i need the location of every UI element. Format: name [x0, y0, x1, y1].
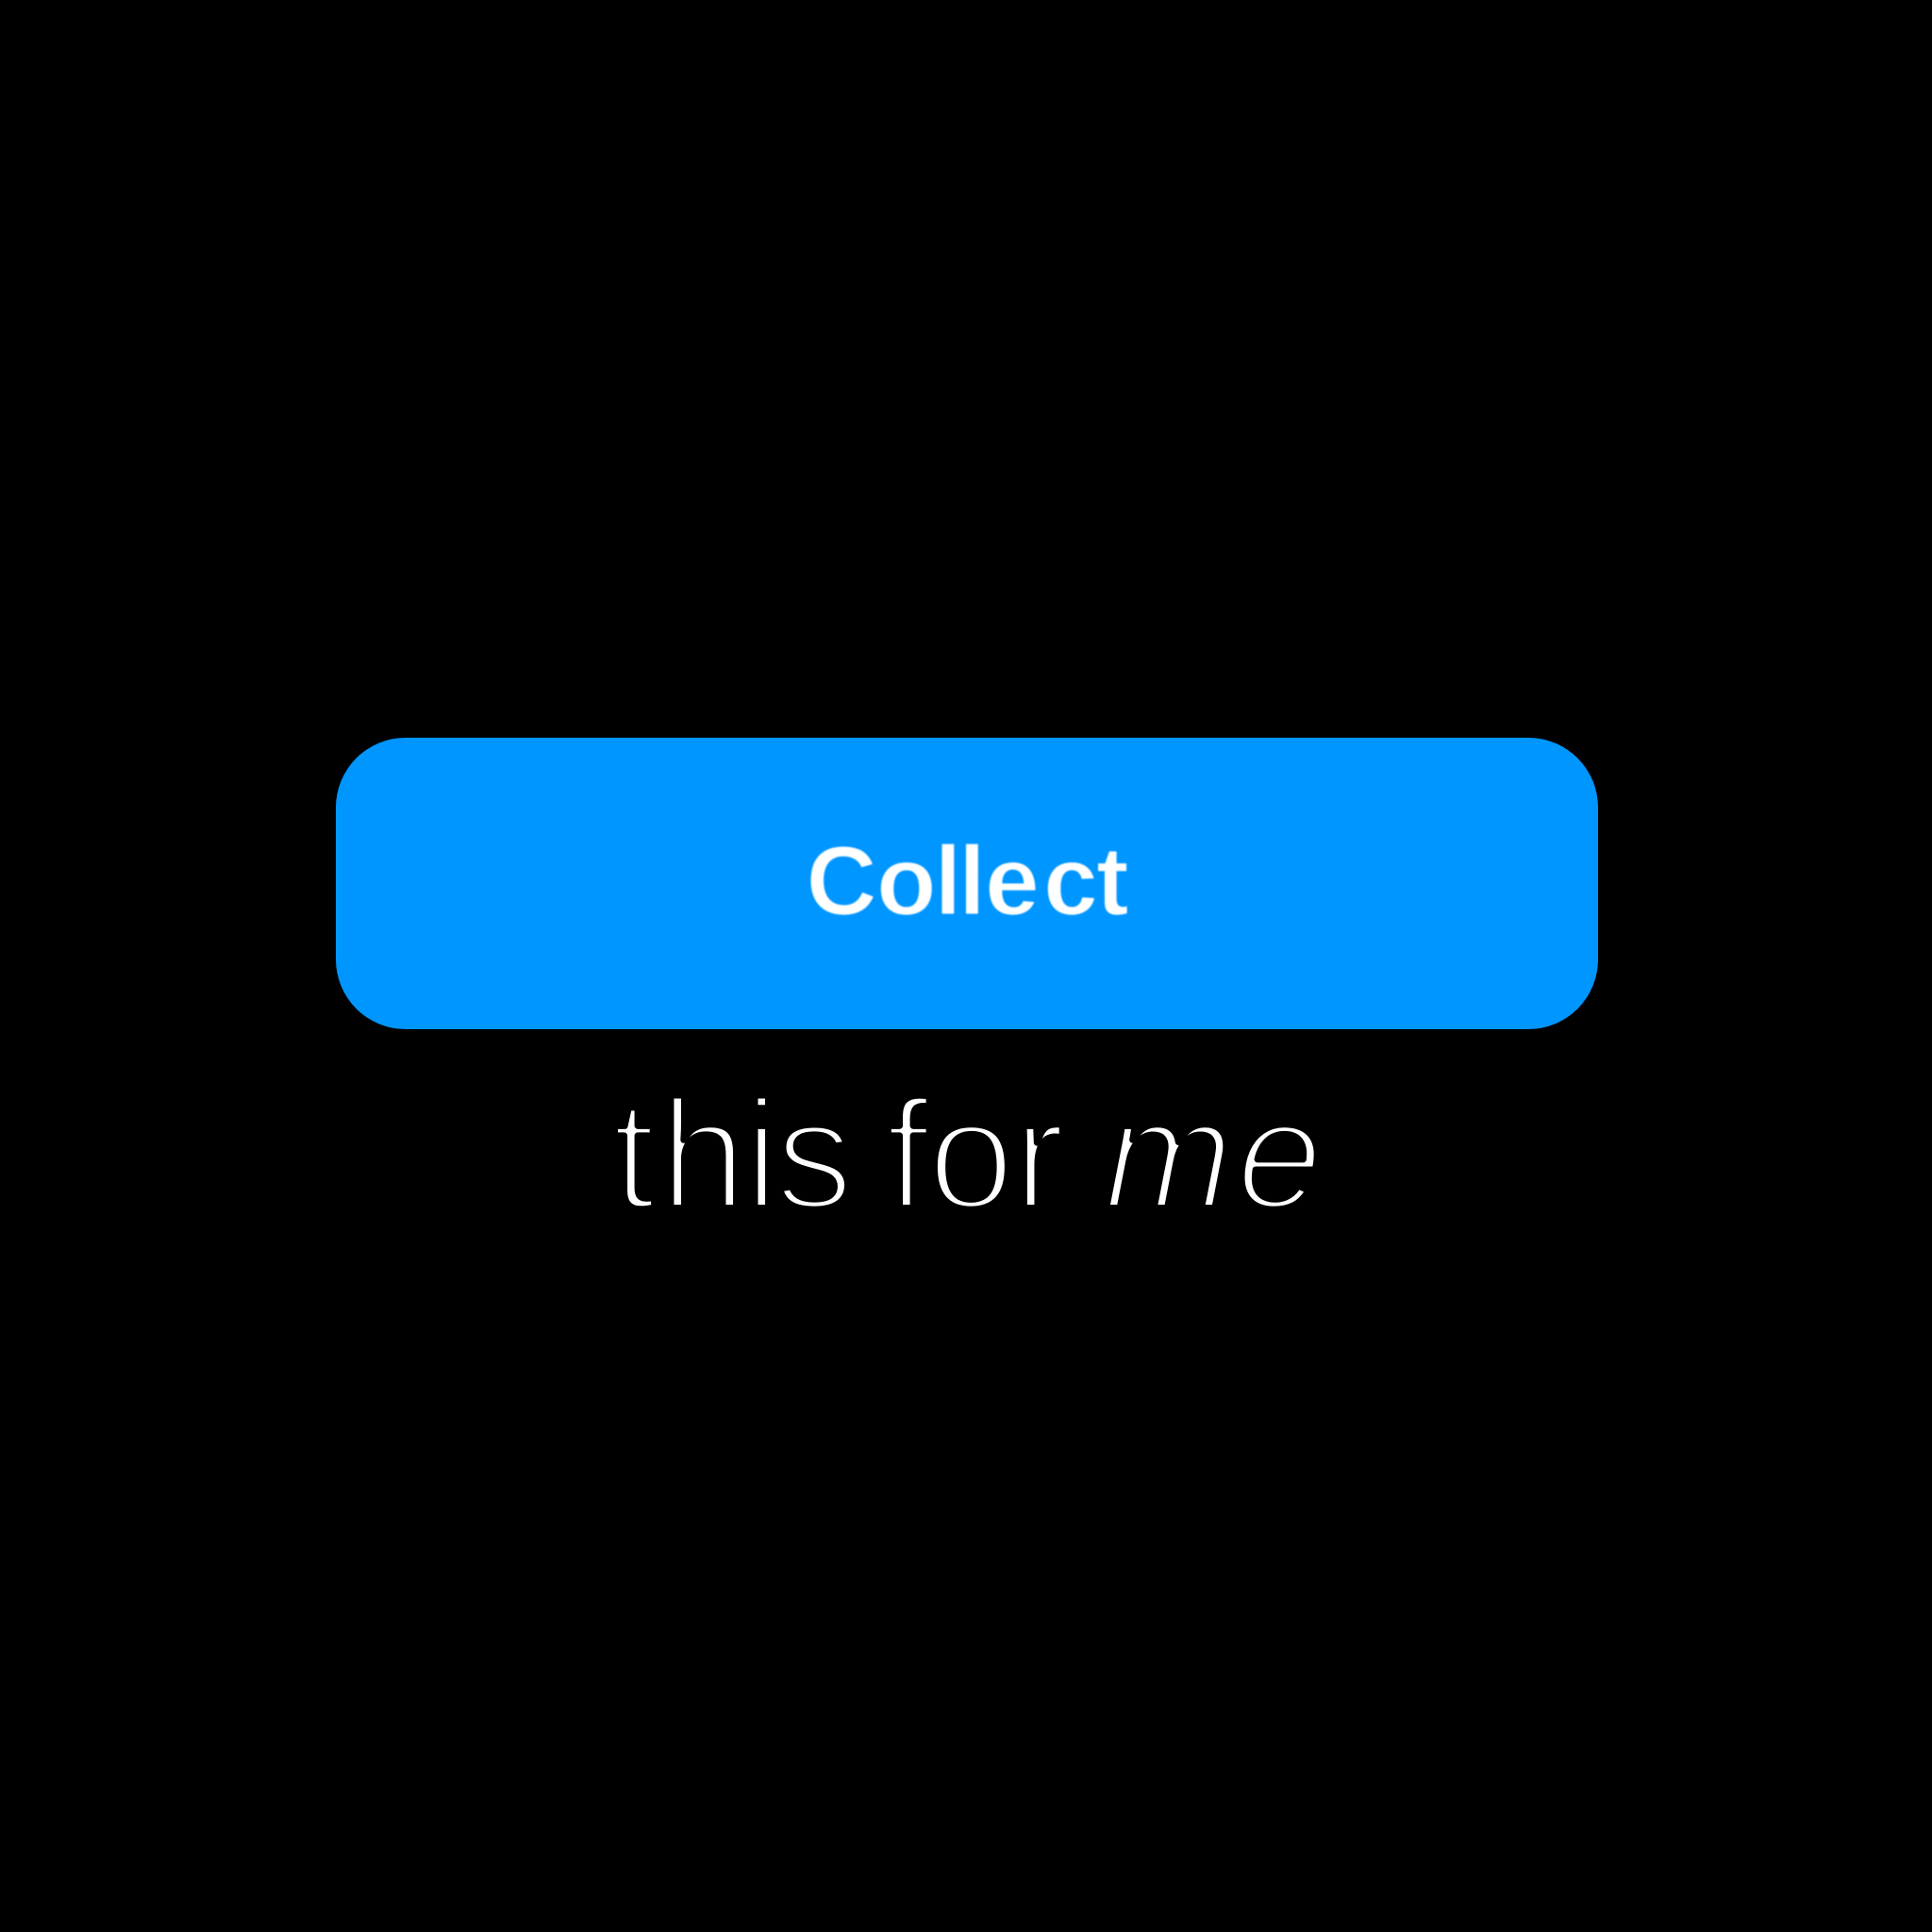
button label: Collect [806, 826, 1129, 936]
caption: this for me: this [612, 1068, 853, 1241]
caption: this for me: me [1104, 1068, 1323, 1241]
button shape [336, 738, 1598, 1029]
button: Collect [336, 738, 1598, 1029]
caption: this for me: for [886, 1068, 1065, 1241]
